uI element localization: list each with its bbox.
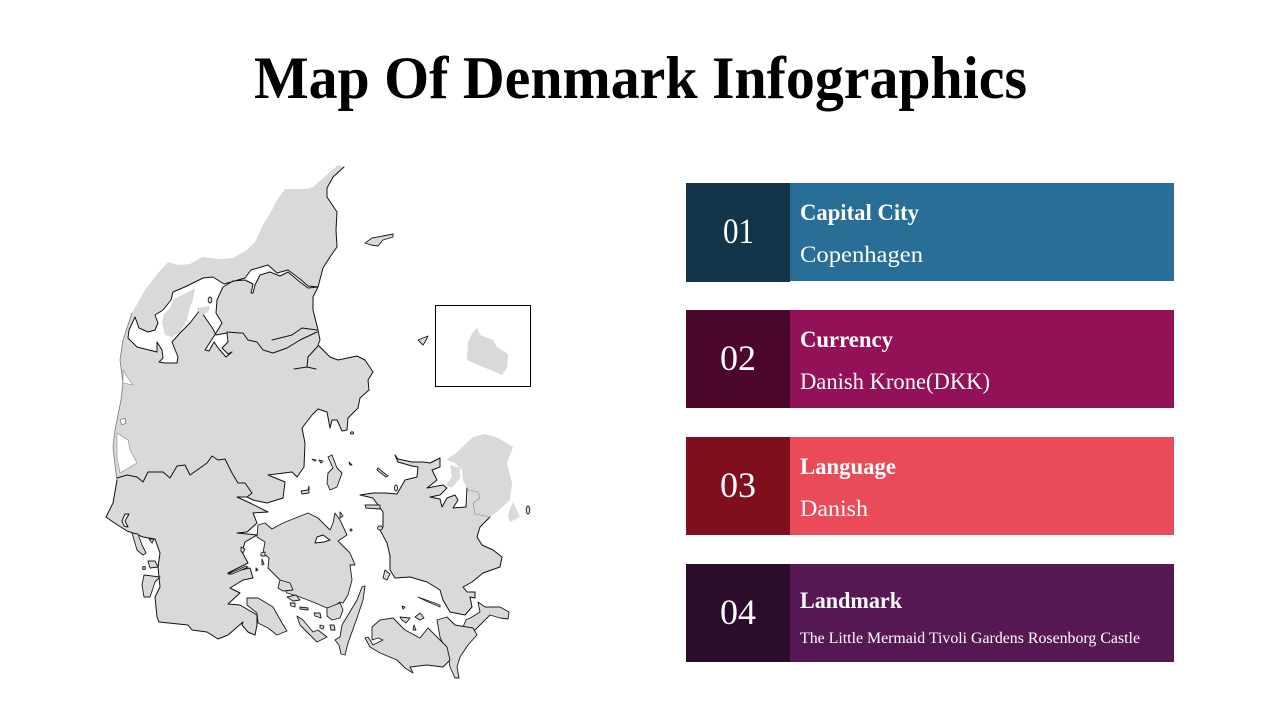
text: Danish Krone: Danish Krone(DKK) <box>800 369 990 394</box>
island: Tåsinge <box>327 603 343 620</box>
heading: Language: Language <box>800 454 896 479</box>
island: Læsø <box>365 234 393 246</box>
island: Als <box>247 598 287 635</box>
inset frame: Bornholm <box>436 306 530 386</box>
heading: Capital City: Capital City <box>800 200 919 225</box>
number 01: 01 <box>723 211 754 251</box>
island: Møn <box>463 602 509 630</box>
island: Falster <box>437 617 477 678</box>
islands: Zealand west islets <box>350 468 398 531</box>
card 3: Language <box>686 437 1174 535</box>
island: Rømø and Wadden islands <box>122 514 160 597</box>
Odense Fjord <box>315 535 330 543</box>
card 1: Capital City <box>686 183 1174 282</box>
islands: Smålandsfarvandet <box>383 570 440 630</box>
island: Limfjord islet <box>208 297 212 303</box>
heading: Currency: Currency <box>800 327 893 352</box>
number block 01 <box>686 183 790 282</box>
heading: Landmark: Landmark <box>800 588 902 613</box>
island: Anholt <box>418 336 428 345</box>
map of Denmark <box>106 165 530 678</box>
card 2: Currency <box>686 310 1174 408</box>
island: Fur <box>197 306 210 315</box>
text: Danish: Danish <box>800 496 869 521</box>
fjord lines: east Jutland <box>117 328 318 497</box>
number block 04 <box>686 564 790 662</box>
region: Funen <box>257 513 355 608</box>
number 02: 02 <box>720 338 756 378</box>
islands: Kattegat islets <box>301 432 354 518</box>
region: Jutland <box>106 165 373 639</box>
islands: South Funen archipelago <box>228 547 335 630</box>
island: Langeland <box>335 586 365 655</box>
number block 03 <box>686 437 790 535</box>
island: Saltholm and Amager <box>508 502 530 522</box>
region: Zealand <box>360 434 513 615</box>
number 04: 04 <box>720 592 756 632</box>
number block 02 <box>686 310 790 408</box>
title: Map Of Denmark Infographics <box>254 45 1027 111</box>
text: Copenhagen: Copenhagen <box>800 242 924 267</box>
card 4: Landmark <box>686 564 1174 662</box>
island: Samsø <box>327 455 342 490</box>
island: Ærø <box>297 616 327 642</box>
text: landmarks list: The Little Mermaid Tivoli Gardens Rosenborg Castle <box>800 630 1140 647</box>
west coast lagoons <box>117 370 137 473</box>
island: Lolland <box>365 618 450 673</box>
number 03: 03 <box>720 465 756 505</box>
island: Mors <box>162 288 195 337</box>
region: Limfjord <box>128 265 318 363</box>
